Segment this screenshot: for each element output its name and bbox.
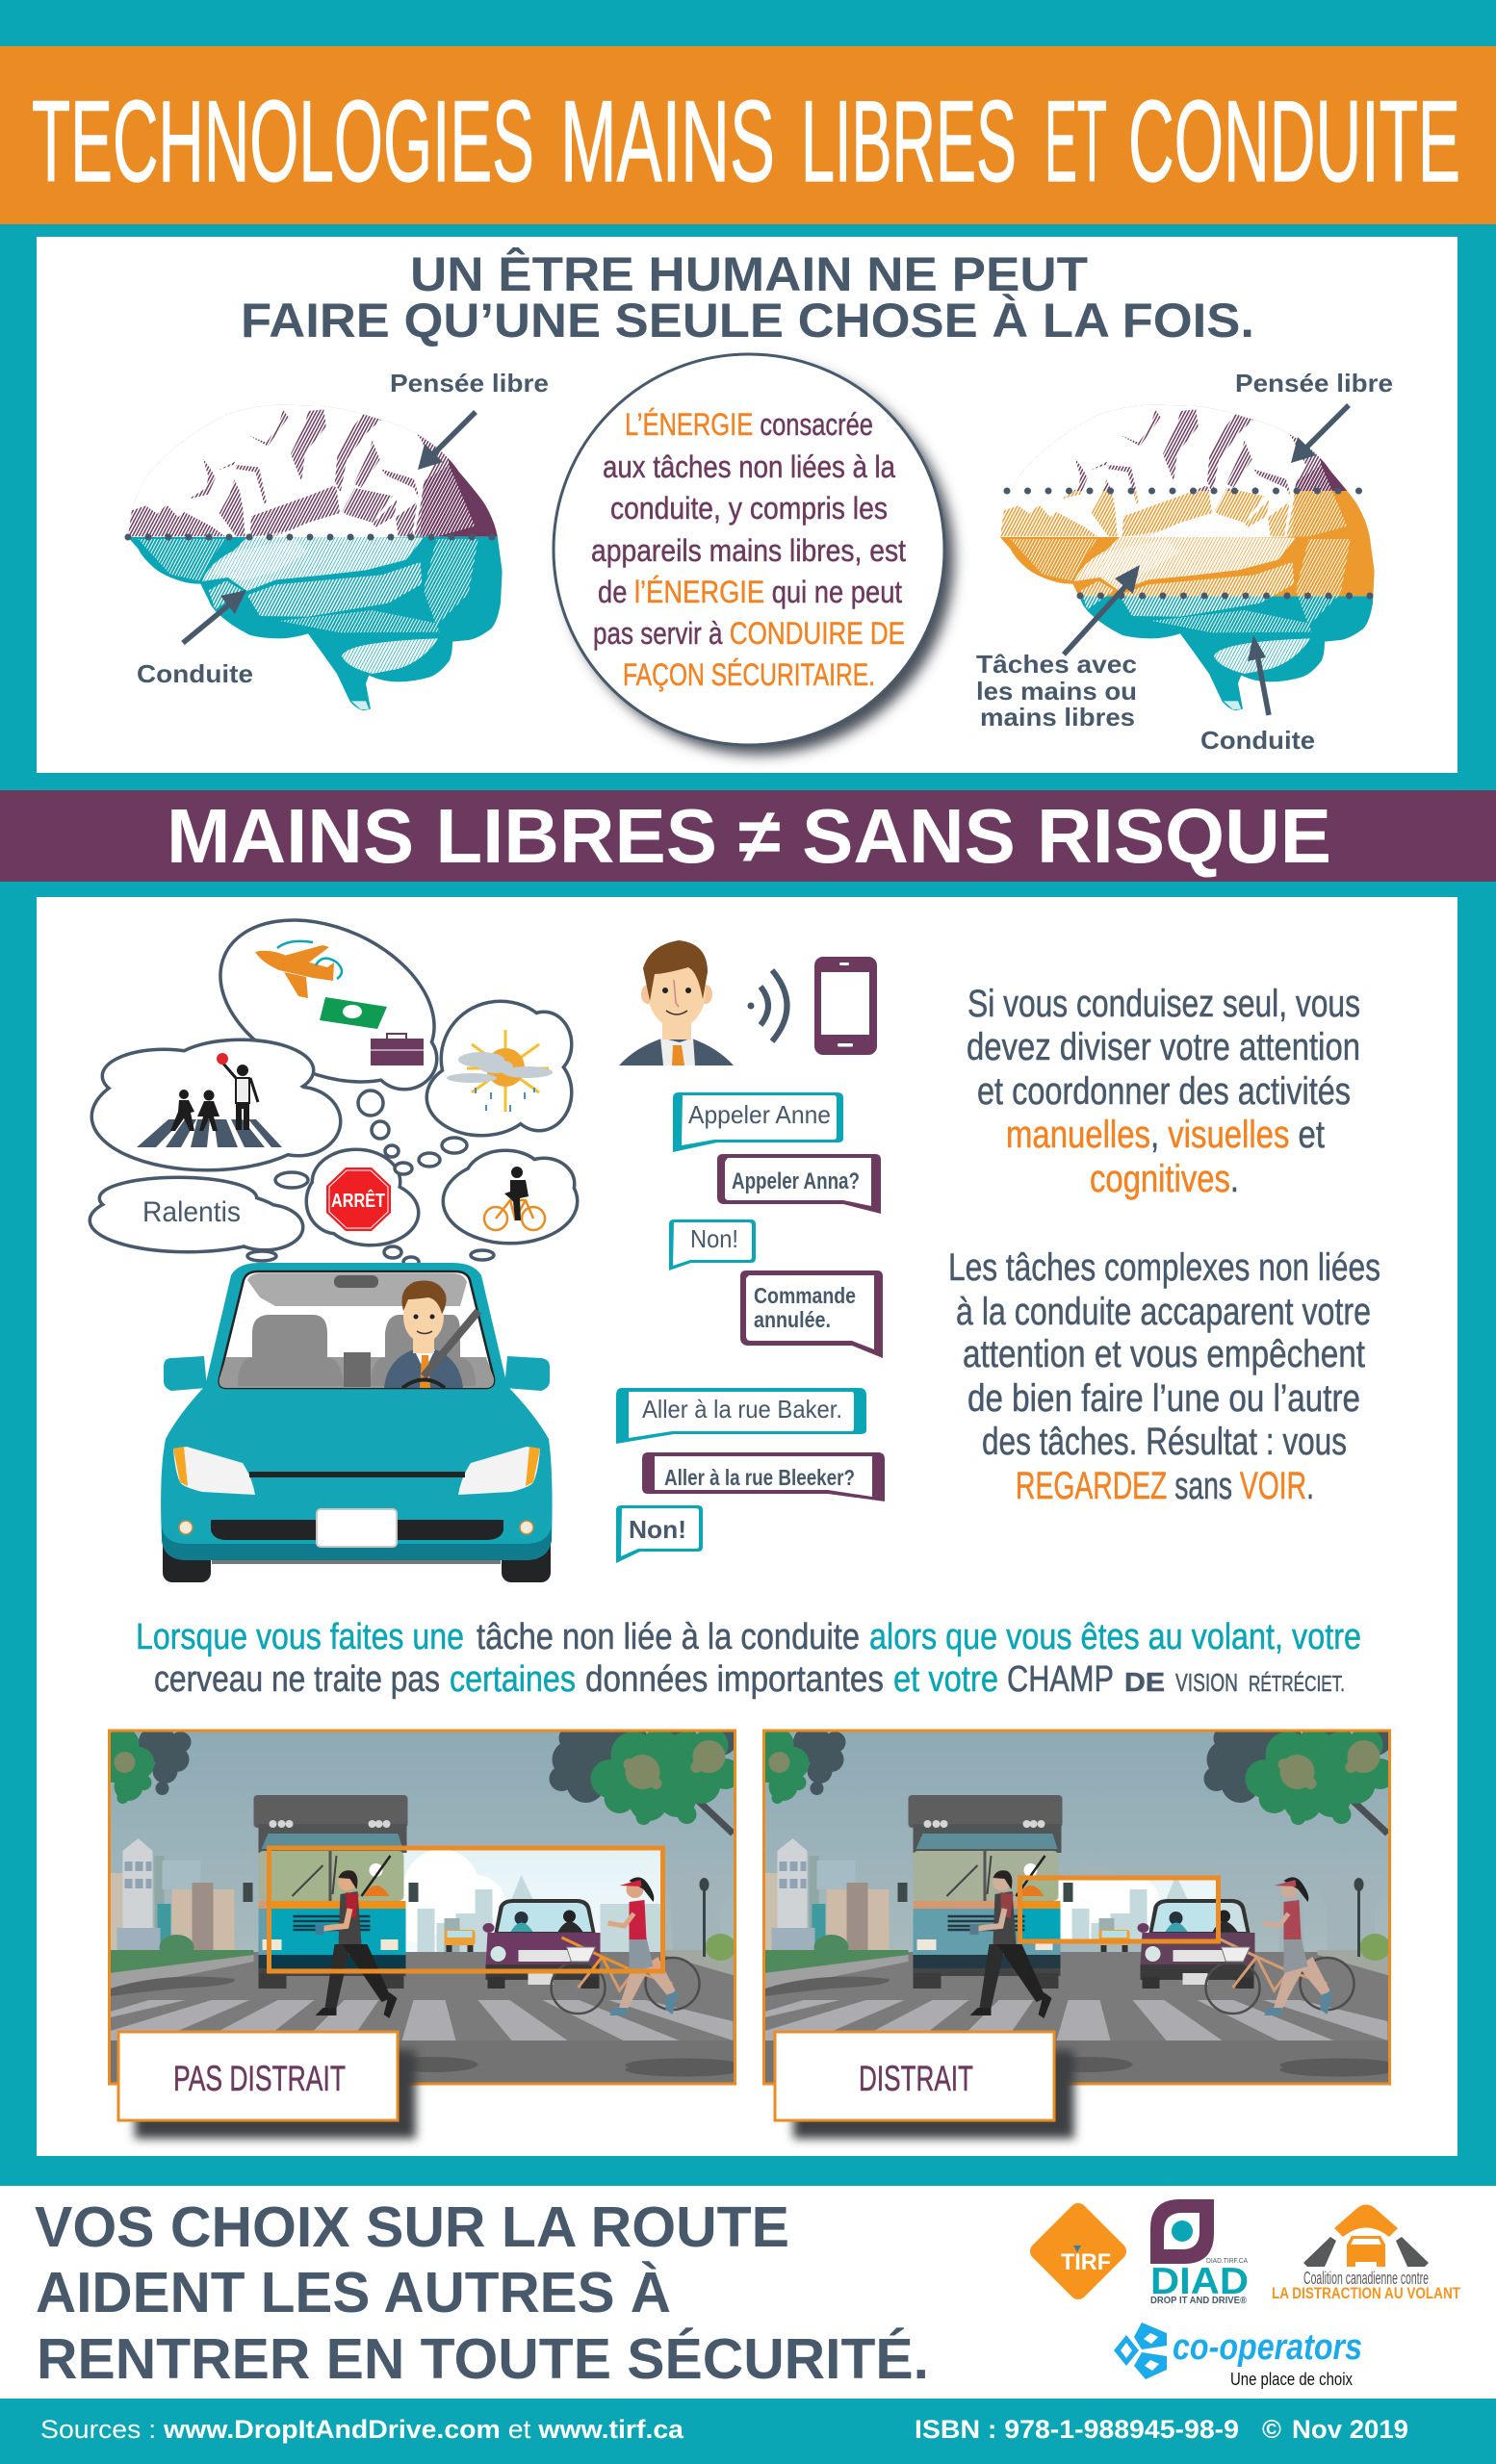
heading: one thing at a time (241, 247, 1254, 347)
label: driving right: Conduite (1200, 726, 1315, 755)
cloud: weather (428, 1003, 570, 1134)
purple section banner: MAINS LIBRES ≠ SANS RISQUE (167, 793, 1331, 879)
title banner (0, 46, 1496, 224)
text: field of vision narrows: tâche non liée à la conduite (477, 1617, 860, 1657)
arrow: free thought left (418, 412, 476, 470)
cloud: slow down (91, 1179, 301, 1250)
arrow: free thought right (1291, 405, 1349, 463)
text: field of vision narrows: et votre (893, 1659, 998, 1700)
energy circle (554, 354, 954, 755)
energy text: conduite, y compris les (610, 491, 888, 526)
car with driver (161, 1263, 553, 1582)
slogan: VOS CHOIX SUR LA ROUTE (35, 2195, 789, 2259)
title text: LIBRES (801, 77, 1017, 206)
brain: left, driving and free thought (127, 404, 503, 710)
logo: Co-operators: Une place de choix (1230, 2370, 1353, 2389)
energy text: de l’ÉNERGIE qui ne peut (598, 575, 902, 609)
logo: DIAD: DIAD.TIRF.CA (1206, 2258, 1248, 2265)
logo: DIAD: DIAD (1150, 2261, 1249, 2302)
heading: one thing at a time: UN ÊTRE HUMAIN NE PEUT (410, 247, 1088, 301)
text: dividing attention: et coordonner des activités (977, 1070, 1351, 1113)
dotted dividers right brain (1007, 491, 1372, 596)
panel: hands-free is not risk-free (37, 891, 1457, 2156)
cloud: stop sign (308, 1151, 417, 1244)
ISBN and copyright: © (1262, 2415, 1281, 2444)
panel: one thing at a time (37, 237, 1457, 773)
arrow: hands-free tasks (1064, 565, 1140, 654)
text: complex tasks: REGARDEZ sans VOIR. (1016, 1465, 1314, 1507)
label: hands-free tasks: les mains ou (976, 677, 1137, 706)
energy text: L’ÉNERGIE consacrée (625, 407, 873, 442)
text: complex tasks: de bien faire l’une ou l’autre (967, 1377, 1360, 1420)
icon: man talking (619, 940, 734, 1065)
logo: Co-operators (1114, 2323, 1362, 2389)
text: complex tasks: des tâches. Résultat : vous (982, 1421, 1347, 1463)
energy text: pas servir à CONDUIRE DE (593, 616, 905, 651)
cloud: stop sign: ARRÊT (331, 1189, 385, 1212)
ISBN and copyright: ISBN : 978-1-988945-98-9 (915, 2415, 1239, 2444)
cloud: plane, money, briefcase (197, 891, 457, 1111)
dotted divider left brain (128, 533, 496, 541)
energy text: FAÇON SÉCURITAIRE. (623, 657, 875, 692)
icon: phone (814, 957, 877, 1055)
speech bubble: go to Bleeker street (642, 1452, 885, 1502)
speech bubble: go to Baker street: Aller à la rue Baker. (642, 1395, 842, 1424)
heading: one thing at a time: FAIRE QU’UNE SEULE CHOSE À LA FOIS. (241, 294, 1254, 347)
slogan: RENTRER EN TOUTE SÉCURITÉ. (37, 2327, 929, 2391)
label: distracted (775, 2032, 1054, 2120)
icon: voice waves (749, 970, 787, 1041)
ISBN and copyright (915, 2415, 1408, 2444)
label: hands-free tasks: Tâches avec (976, 650, 1137, 679)
text: dividing attention: manuelles, visuelles et (1006, 1114, 1325, 1156)
arrow: driving left (183, 590, 246, 643)
field of vision narrow (1020, 1878, 1219, 1941)
field of vision wide (270, 1848, 662, 1971)
text: field of vision narrows: cerveau ne traite pas (154, 1659, 440, 1700)
energy text (591, 407, 906, 692)
cloud: cyclist (445, 1152, 576, 1242)
speech bubble: no (669, 1219, 756, 1270)
logo: TIRF: TIRF (1061, 2249, 1111, 2275)
speech bubble: call Anne (673, 1092, 843, 1152)
label: not distracted (118, 2032, 398, 2120)
speech bubble: command cancelled: annulée. (754, 1307, 831, 1332)
text: field of vision narrows: données importantes (585, 1659, 884, 1700)
logo: DIAD (1150, 2199, 1249, 2306)
label: free thought right: Pensée libre (1235, 369, 1393, 398)
text: field of vision narrows: alors que vous êtes au volant, votre (869, 1617, 1361, 1657)
speech bubble: call Anna: Appeler Anna? (732, 1168, 860, 1194)
logo: Co-operators: co-operators (1173, 2327, 1362, 2368)
scene: distracted (753, 1719, 1396, 2139)
speech bubble: call Anna (717, 1154, 881, 1214)
windshield and interior (219, 1271, 494, 1388)
text: field of vision narrows: RÉTRÉCIET. (1249, 1671, 1345, 1696)
brain: right, hands-free load (999, 404, 1375, 710)
logo: DIAD: DROP IT AND DRIVE® (1150, 2296, 1248, 2306)
grille (249, 1472, 465, 1477)
slogan: AIDENT LES AUTRES À (36, 2261, 671, 2324)
cloud: crosswalk (93, 1041, 339, 1168)
title text: ET (1045, 77, 1107, 206)
text: field of vision narrows: Lorsque vous faites une (136, 1617, 464, 1657)
text: field of vision narrows: certaines (450, 1659, 576, 1700)
text: dividing attention: Si vous conduisez seul, vous (967, 983, 1360, 1025)
speech bubble: command cancelled: Commande (754, 1283, 856, 1308)
energy text: aux tâches non liées à la (603, 449, 895, 484)
footer panel (0, 2186, 1496, 2399)
text: complex tasks: attention et vous empêchent (963, 1333, 1365, 1375)
speech bubble: call Anne: Appeler Anne (688, 1100, 831, 1129)
speech bubble: no: Non! (690, 1224, 738, 1253)
sources line: Sources : www.DropItAndDrive.com et www.tirf.ca (40, 2415, 684, 2444)
title text: MAINS (560, 77, 775, 206)
label: hands-free tasks: mains libres (980, 703, 1135, 732)
label: not distracted: PAS DISTRAIT (173, 2059, 346, 2098)
text: dividing attention (967, 983, 1360, 1200)
speech bubble: no bold: Non! (629, 1515, 686, 1544)
energy text: appareils mains libres, est (591, 533, 906, 568)
title text (32, 77, 1460, 206)
thought clouds (91, 891, 576, 1267)
text: field of vision narrows: DE (1124, 1667, 1165, 1697)
slogan (35, 2195, 929, 2391)
text: complex tasks (948, 1246, 1380, 1507)
text: field of vision narrows (136, 1617, 1361, 1700)
title text: TECHNOLOGIES (32, 77, 534, 206)
arrow: driving right (1248, 635, 1269, 715)
text: dividing attention: cognitives. (1090, 1158, 1239, 1200)
logo: Canadian Coalition (1272, 2204, 1460, 2302)
cloud: slow down: Ralentis (142, 1196, 241, 1228)
ISBN and copyright: Nov 2019 (1292, 2415, 1408, 2444)
speech bubble: command cancelled (740, 1270, 883, 1358)
thought bubbles (247, 1091, 494, 1267)
text: dividing attention: devez diviser votre attention (967, 1026, 1360, 1068)
licence plate (317, 1509, 397, 1547)
text: field of vision narrows: VISION (1175, 1668, 1238, 1697)
speech bubble: no bold (616, 1505, 703, 1563)
label: free thought left: Pensée libre (390, 369, 549, 398)
label: hands-free tasks (976, 650, 1137, 732)
text: field of vision narrows: CHAMP (1007, 1659, 1114, 1700)
label: driving left: Conduite (137, 659, 253, 688)
text: complex tasks: à la conduite accaparent votre (956, 1291, 1371, 1333)
label: distracted: DISTRAIT (859, 2059, 973, 2098)
speech bubble: go to Bleeker street: Aller à la rue Bleeker? (664, 1465, 855, 1490)
text: complex tasks: Les tâches complexes non liées (948, 1246, 1380, 1289)
headlights (173, 1447, 540, 1495)
scene: not distracted (98, 1719, 741, 2139)
logo: TIRF (1026, 2199, 1130, 2303)
speech bubble: go to Baker street (616, 1388, 866, 1444)
